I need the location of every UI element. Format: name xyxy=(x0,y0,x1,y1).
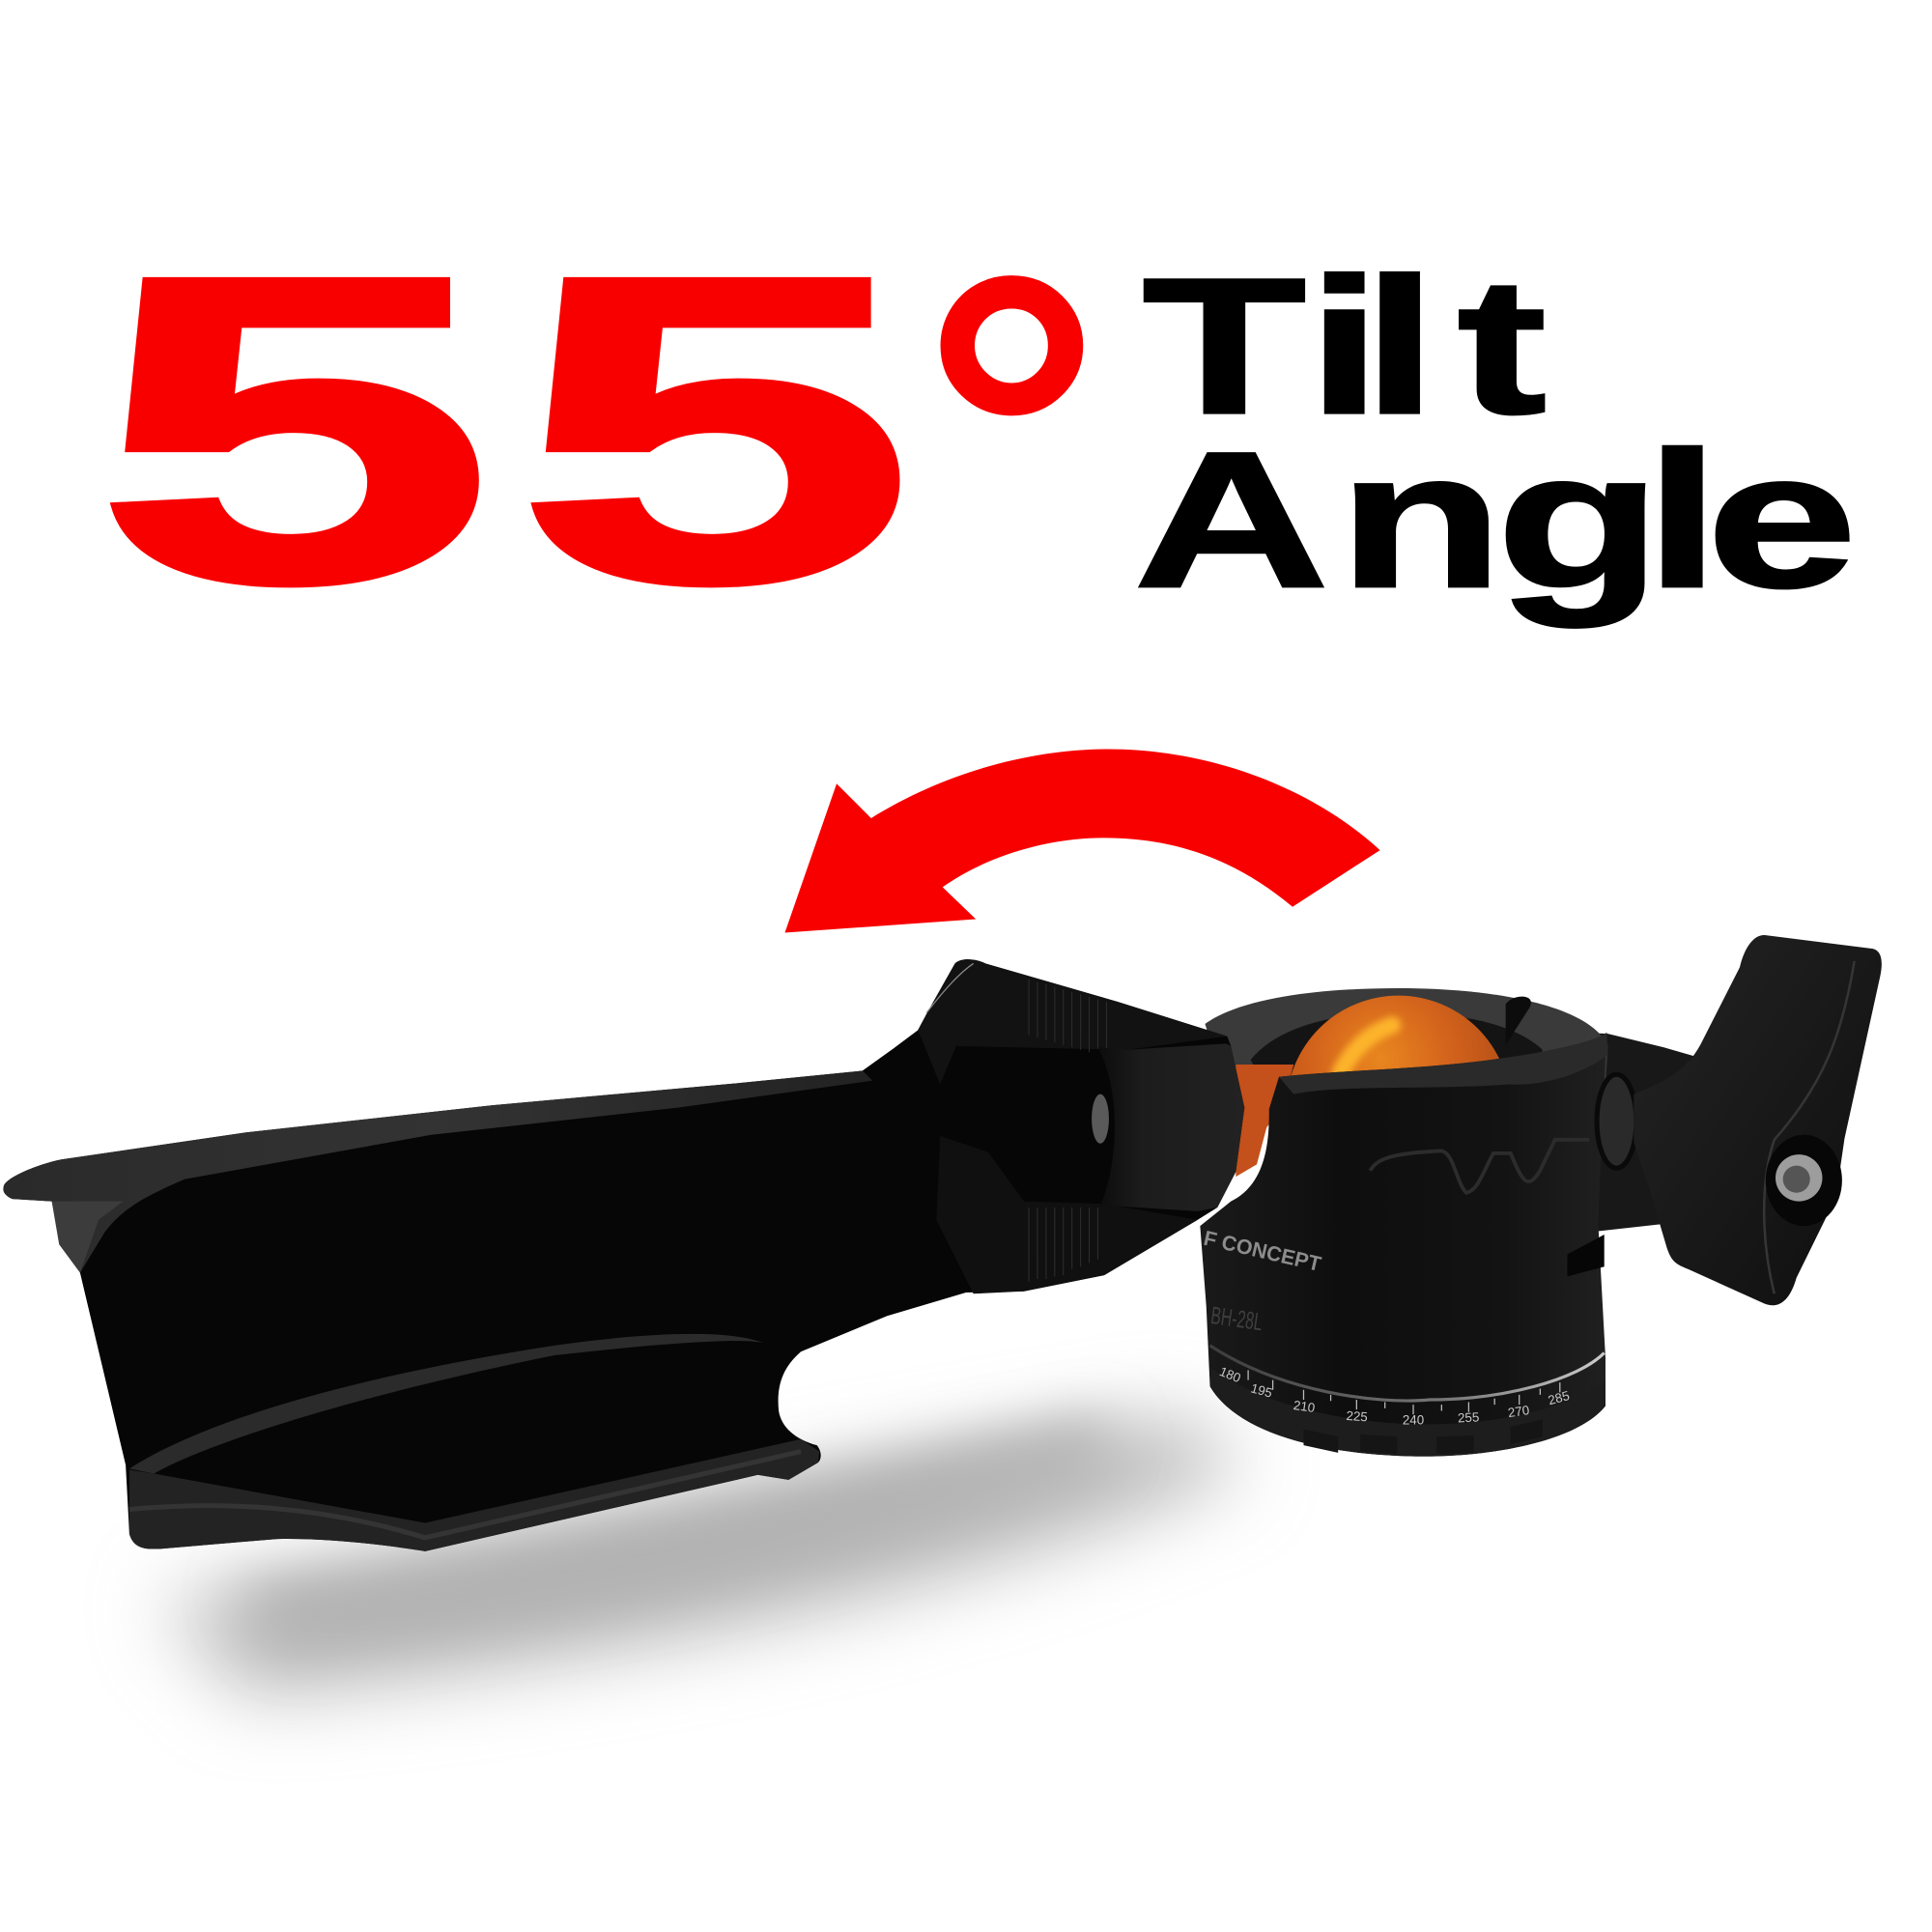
scale numbers: 210 xyxy=(1293,1398,1316,1415)
collar crack xyxy=(1506,997,1531,1045)
bracket body silhouette xyxy=(3,959,1244,1551)
big number 55: 55 xyxy=(94,185,915,673)
base ring xyxy=(1210,1368,1605,1457)
scale numbers: 270 xyxy=(1507,1403,1530,1420)
front rim xyxy=(1279,1033,1608,1094)
lower ridge xyxy=(129,1334,764,1474)
arrow: tilt direction xyxy=(784,750,1380,933)
ball head xyxy=(1200,988,1608,1457)
brand text: F CONCEPT xyxy=(1202,1226,1323,1276)
hinge highlight xyxy=(926,963,974,1012)
scale numbers: 180 xyxy=(1217,1364,1243,1385)
knob screw xyxy=(1766,1135,1842,1226)
print lines xyxy=(1029,980,1106,1282)
collar back ring xyxy=(1205,988,1608,1109)
top lip xyxy=(3,1070,872,1273)
body slot xyxy=(1567,1235,1605,1276)
heading: Tilt: Tilt xyxy=(1142,239,1547,454)
scale numbers: 225 xyxy=(1346,1408,1368,1424)
knob neck washer xyxy=(1597,1074,1636,1168)
clamp cylinder xyxy=(1097,1043,1244,1211)
scale ticks xyxy=(1248,1370,1560,1414)
model text: BH-28L xyxy=(1209,1302,1264,1336)
scale numbers xyxy=(1217,1364,1571,1427)
main body xyxy=(1200,1033,1606,1457)
orange ball xyxy=(1287,996,1511,1220)
socket screw xyxy=(1092,1094,1109,1144)
scale numbers: 240 xyxy=(1403,1412,1424,1427)
heading: Angle: Angle xyxy=(1133,411,1857,628)
bottom lip xyxy=(129,1439,819,1551)
scale numbers: 195 xyxy=(1249,1380,1274,1401)
scale numbers: 285 xyxy=(1547,1388,1571,1407)
silver ring xyxy=(1210,1346,1605,1401)
knob handle xyxy=(1634,935,1882,1305)
scale numbers: 255 xyxy=(1458,1409,1480,1426)
degree symbol: ° xyxy=(921,182,1103,691)
grip notches xyxy=(1303,1419,1543,1454)
locking knob xyxy=(1597,935,1882,1305)
drip marks xyxy=(1370,1140,1589,1193)
bracket xyxy=(3,959,1244,1551)
ground shadow xyxy=(160,1417,1244,1694)
knob arm behind body xyxy=(1583,1033,1707,1233)
orange post xyxy=(1236,1065,1293,1177)
hinge sides xyxy=(918,959,1227,1084)
